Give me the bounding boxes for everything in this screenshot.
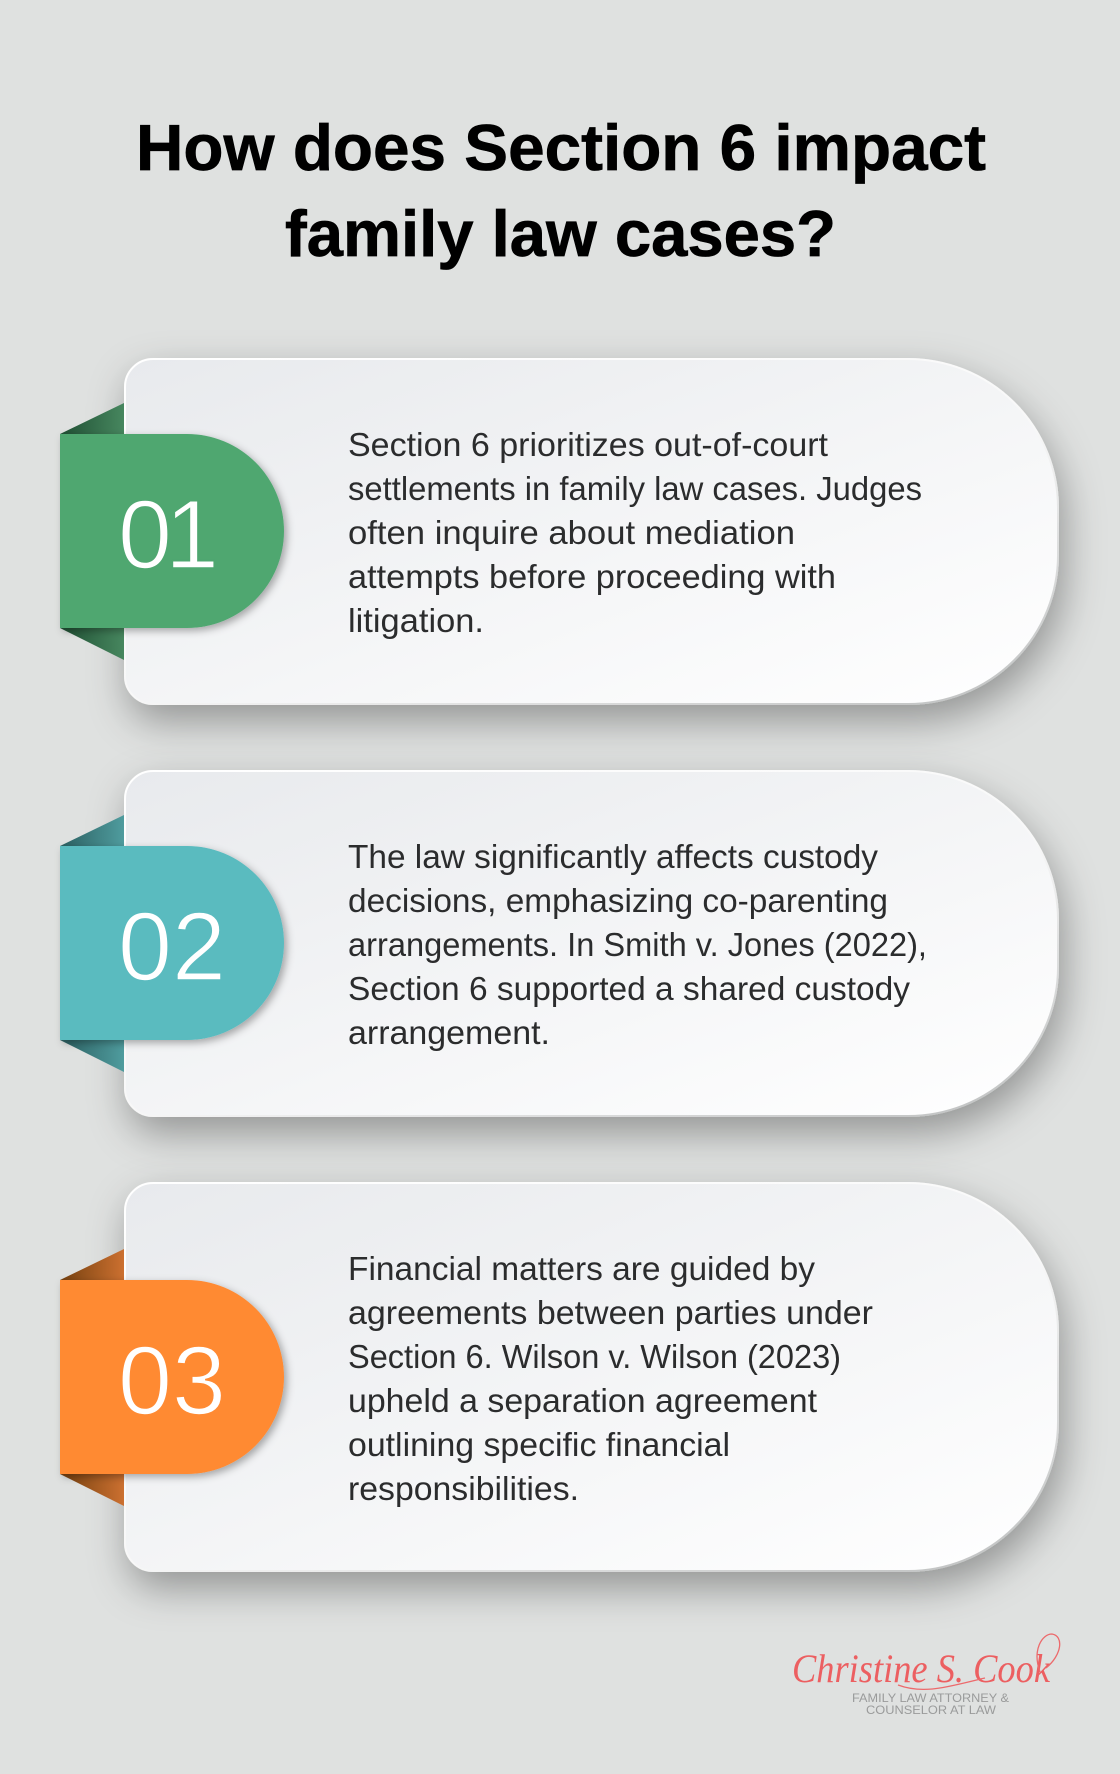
text block 01: Section 6 prioritizes out-of-court <box>348 426 828 463</box>
text block 01: settlements in family law cases. Judges <box>348 470 922 507</box>
card 02 <box>125 771 1058 1116</box>
ribbon fold top 01 <box>60 403 124 434</box>
text block 03: Financial matters are guided by <box>348 1250 816 1287</box>
logo swash <box>898 1634 1060 1689</box>
text block 01: attempts before proceeding with <box>348 558 836 595</box>
text block 03: agreements between parties under <box>348 1294 873 1331</box>
text block 02: arrangement. <box>348 1014 550 1051</box>
text block 03: Section 6. Wilson v. Wilson (2023) <box>348 1338 841 1375</box>
text block 03: outlining specific financial <box>348 1426 730 1463</box>
text block 03: upheld a separation agreement <box>348 1382 817 1419</box>
ribbon fold bottom 02 <box>60 1040 124 1072</box>
ribbon fold bottom 01 <box>60 628 124 660</box>
panel: step 02 <box>60 771 1058 1116</box>
card 03 <box>125 1183 1058 1571</box>
card 01 <box>125 359 1058 704</box>
logo name: Christine S. Cook <box>792 1646 1051 1691</box>
text block 02 <box>348 838 927 1051</box>
panel: step 01 <box>60 359 1058 704</box>
ribbon fold bottom 03 <box>60 1474 124 1506</box>
text block 02: decisions, emphasizing co-parenting <box>348 882 888 919</box>
panel: step 03 <box>60 1183 1058 1571</box>
text block 03 <box>348 1250 873 1507</box>
logo: Christine S. Cook: COUNSELOR AT LAW <box>866 1705 996 1717</box>
ribbon fold top 02 <box>60 815 124 846</box>
text block 02: Section 6 supported a shared custody <box>348 970 910 1007</box>
number 03: 03 <box>118 1326 226 1435</box>
text block 01: often inquire about mediation <box>348 514 795 551</box>
text block 03: responsibilities. <box>348 1470 579 1507</box>
logo tagline: FAMILY LAW ATTORNEY & <box>852 1693 1009 1705</box>
number 01: 01 <box>118 480 219 589</box>
number 02: 02 <box>118 892 226 1001</box>
title: How does Section 6 impact <box>136 111 986 184</box>
text block 02: The law significantly affects custody <box>348 838 878 875</box>
number badge 03 <box>60 1280 284 1474</box>
text block 01 <box>348 426 922 639</box>
title: family law cases? <box>285 197 836 270</box>
number badge 01 <box>60 434 284 628</box>
logo: Christine S. Cook <box>792 1634 1060 1717</box>
number badge 02 <box>60 846 284 1040</box>
ribbon fold top 03 <box>60 1249 124 1280</box>
text block 01: litigation. <box>348 602 484 639</box>
title <box>136 111 986 270</box>
text block 02: arrangements. In Smith v. Jones (2022), <box>348 926 927 963</box>
